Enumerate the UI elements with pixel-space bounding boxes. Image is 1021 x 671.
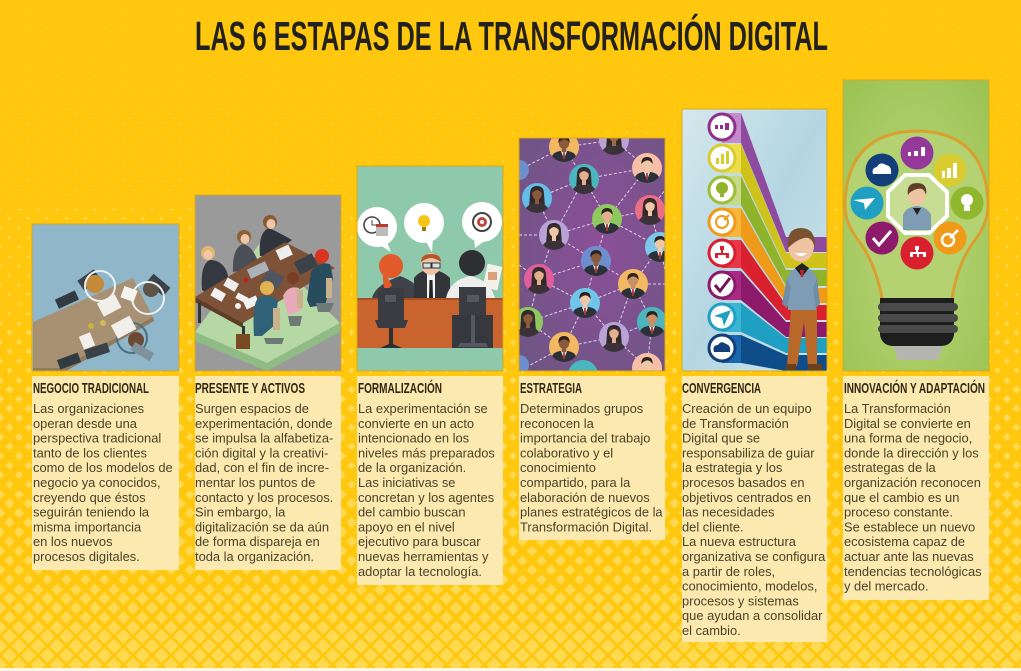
body text: ecosistema capaz de	[844, 534, 965, 549]
body text: de la organización.	[358, 460, 466, 475]
body text: digitalización se da aún	[195, 519, 329, 534]
body text: conocimiento, modelos,	[682, 579, 817, 594]
icons: petals	[850, 136, 984, 270]
body text: contacto y los procesos.	[195, 490, 333, 505]
body text: operan desde una	[33, 416, 138, 431]
body text: ción digital y la creativi-	[195, 445, 328, 460]
illustration: meeting table from above	[32, 224, 179, 371]
body text: responsabiliza de guiar	[682, 445, 815, 460]
body text: Digital se convierte en	[844, 416, 971, 431]
bulb base	[878, 298, 958, 360]
body text: convierte en un acto	[358, 416, 474, 431]
network lines	[519, 140, 665, 371]
body text: tanto de los clientes	[33, 445, 147, 460]
body text: niveles más preparados	[358, 445, 495, 460]
text block	[32, 376, 179, 570]
body text: las necesidades	[682, 505, 774, 520]
items on the table	[210, 245, 318, 309]
body text: La nueva estructura	[682, 534, 797, 549]
heading: PRESENTE Y ACTIVOS	[195, 380, 305, 397]
heading: NEGOCIO TRADICIONAL	[33, 380, 149, 397]
body text: Se establece un nuevo	[844, 519, 975, 534]
body text: organización reconocen	[844, 475, 981, 490]
body text: proceso constante.	[844, 505, 953, 520]
body text: Las organizaciones	[33, 401, 144, 416]
body text: objetivos centrados en	[682, 490, 811, 505]
body text: de forma dispareja en	[195, 534, 320, 549]
body text: el cambio.	[682, 623, 741, 638]
ribbons	[722, 113, 827, 371]
heading: FORMALIZACIÓN	[358, 379, 442, 397]
body text: procesos y sistemas	[682, 593, 799, 608]
illustration: light bulb	[843, 80, 989, 371]
body text: organizativa se configura	[682, 549, 826, 564]
body text: La experimentación se	[358, 401, 488, 416]
body text: planes estratégicos de la	[520, 505, 663, 520]
illustration: interview desk with speech bubbles	[357, 166, 503, 371]
body text: mentar los puntos de	[195, 475, 315, 490]
body text: apoyo en el nivel	[358, 519, 455, 534]
panel: presente y activos	[195, 195, 341, 570]
seated people behind table	[201, 215, 292, 295]
body text: Digital que se	[682, 431, 760, 446]
body text: en los nuevos	[33, 534, 113, 549]
body text: que el cambio es un	[844, 490, 959, 505]
illustration: team around a table	[195, 195, 341, 371]
body text: se impulsa la alfabetiza-	[195, 431, 333, 446]
body text: donde la dirección y los	[844, 445, 979, 460]
body text: seguirán teniendo la	[33, 505, 150, 520]
body text: la estrategia y los	[682, 460, 782, 475]
body text: y del mercado.	[844, 579, 929, 594]
body text: negocio ya conocidos,	[33, 475, 161, 490]
body text: actuar ante las nuevas	[844, 549, 974, 564]
body text: ejecutivo para buscar	[358, 534, 481, 549]
chairs	[264, 303, 334, 344]
icons: circles	[709, 114, 735, 361]
body text: Creación de un equipo	[682, 401, 812, 416]
body text: del cliente.	[682, 519, 744, 534]
body text: de Transformación	[682, 416, 789, 431]
icon: bubble clock	[357, 207, 397, 252]
body text: Determinados grupos	[520, 401, 643, 416]
body text: importancia del trabajo	[520, 431, 650, 446]
body text: concretan y los agentes	[358, 490, 494, 505]
panel: convergencia	[682, 109, 827, 642]
body text: La Transformación	[844, 401, 951, 416]
heading: ESTRATEGIA	[520, 380, 582, 397]
body text: adoptar la tecnología.	[358, 564, 482, 579]
octagon portrait	[888, 175, 947, 233]
body text: creyendo que éstos	[33, 490, 146, 505]
body text: estrategas de la	[844, 460, 937, 475]
text block	[843, 376, 989, 600]
body text: Transformación Digital.	[520, 519, 652, 534]
body text: Las iniciativas se	[358, 475, 455, 490]
body text: Sin embargo, la	[195, 505, 286, 520]
body text: reconocen la	[520, 416, 595, 431]
body text: toda la organización.	[195, 549, 314, 564]
body text: conocimiento	[520, 460, 596, 475]
panel: negocio tradicional	[32, 224, 179, 570]
body text: procesos digitales.	[33, 549, 140, 564]
body text: experimentación, donde	[195, 416, 333, 431]
body text: que ayudan a consolidar	[682, 608, 823, 623]
body text: Surgen espacios de	[195, 401, 309, 416]
text block	[195, 376, 341, 570]
illustration: network of people	[520, 138, 664, 370]
panel: formalización	[357, 166, 503, 585]
body text: intencionado en los	[358, 431, 469, 446]
body text: perspectiva tradicional	[33, 431, 161, 446]
panel: estrategia	[518, 138, 666, 540]
body text: elaboración de nuevos	[520, 490, 650, 505]
body text: colaborativo y el	[520, 445, 613, 460]
seated people in front of table	[254, 249, 333, 336]
text block	[357, 376, 503, 585]
body text: misma importancia	[33, 519, 142, 534]
body text: una forma de negocio,	[844, 431, 972, 446]
heading: CONVERGENCIA	[682, 380, 761, 397]
icon: bubble light bulb	[404, 203, 444, 252]
body text: a partir de roles,	[682, 564, 775, 579]
body text: del cambio buscan	[358, 505, 466, 520]
avatars	[520, 138, 664, 370]
bulb outline	[845, 131, 988, 298]
body text: como de los modelos de	[33, 460, 173, 475]
body text: procesos basados en	[682, 475, 805, 490]
panel: innovación y adaptación	[843, 80, 989, 600]
man	[782, 228, 822, 370]
body text: dad, con el fin de incre-	[195, 460, 329, 475]
body text: tendencias tecnológicas	[844, 564, 982, 579]
text block	[519, 376, 665, 540]
illustration: ribbons and man	[682, 109, 827, 371]
body text: compartido, para la	[520, 475, 631, 490]
text block	[682, 376, 827, 642]
icon: bubble target	[462, 202, 502, 248]
body text: nuevas herramientas y	[358, 549, 489, 564]
